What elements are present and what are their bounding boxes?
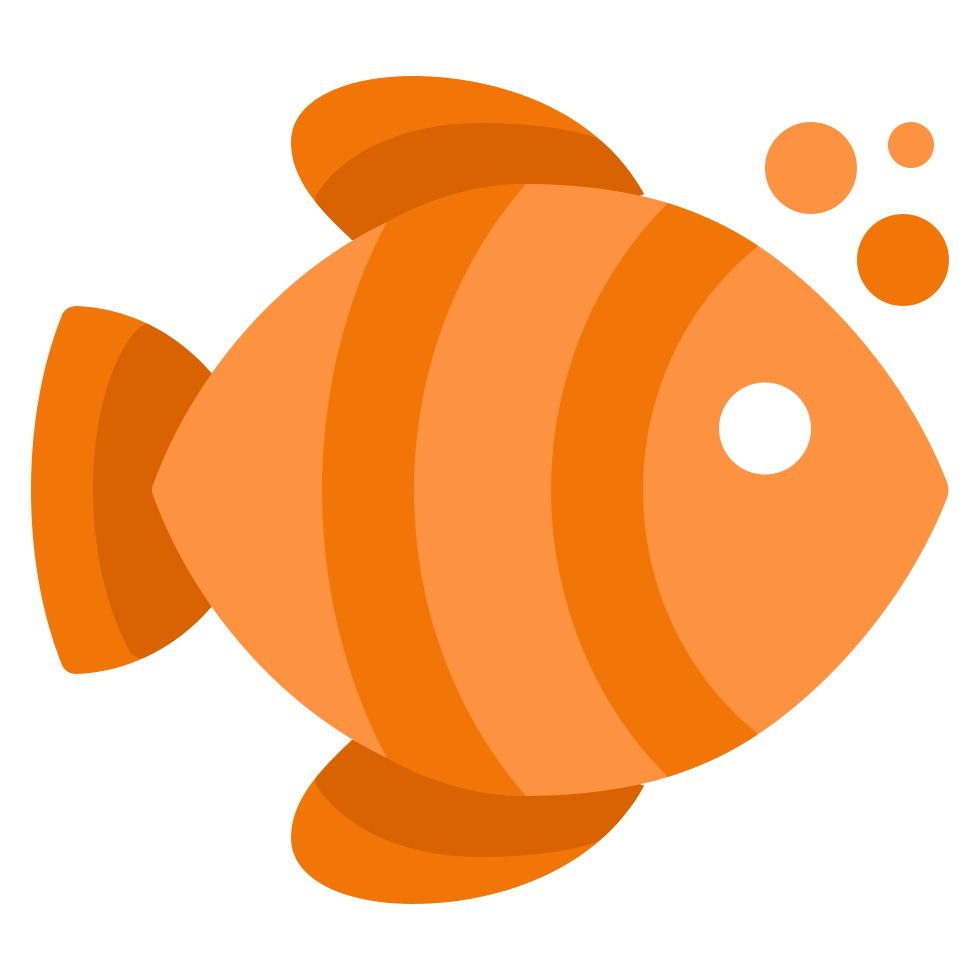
icon: dark bubble: [857, 214, 949, 306]
icon: body stripe left: [322, 170, 526, 810]
icon: small light bubble: [888, 122, 934, 168]
icon: body stripe right: [551, 180, 757, 800]
icon: large light bubble: [765, 122, 857, 214]
icon: eye: [719, 382, 811, 474]
illustration: orange fish with bubbles: [31, 76, 949, 904]
icon: fish body: [152, 184, 948, 796]
icon: bottom fin: [291, 740, 644, 904]
icon: tail fin: [31, 306, 212, 674]
icon: top fin: [291, 76, 644, 240]
